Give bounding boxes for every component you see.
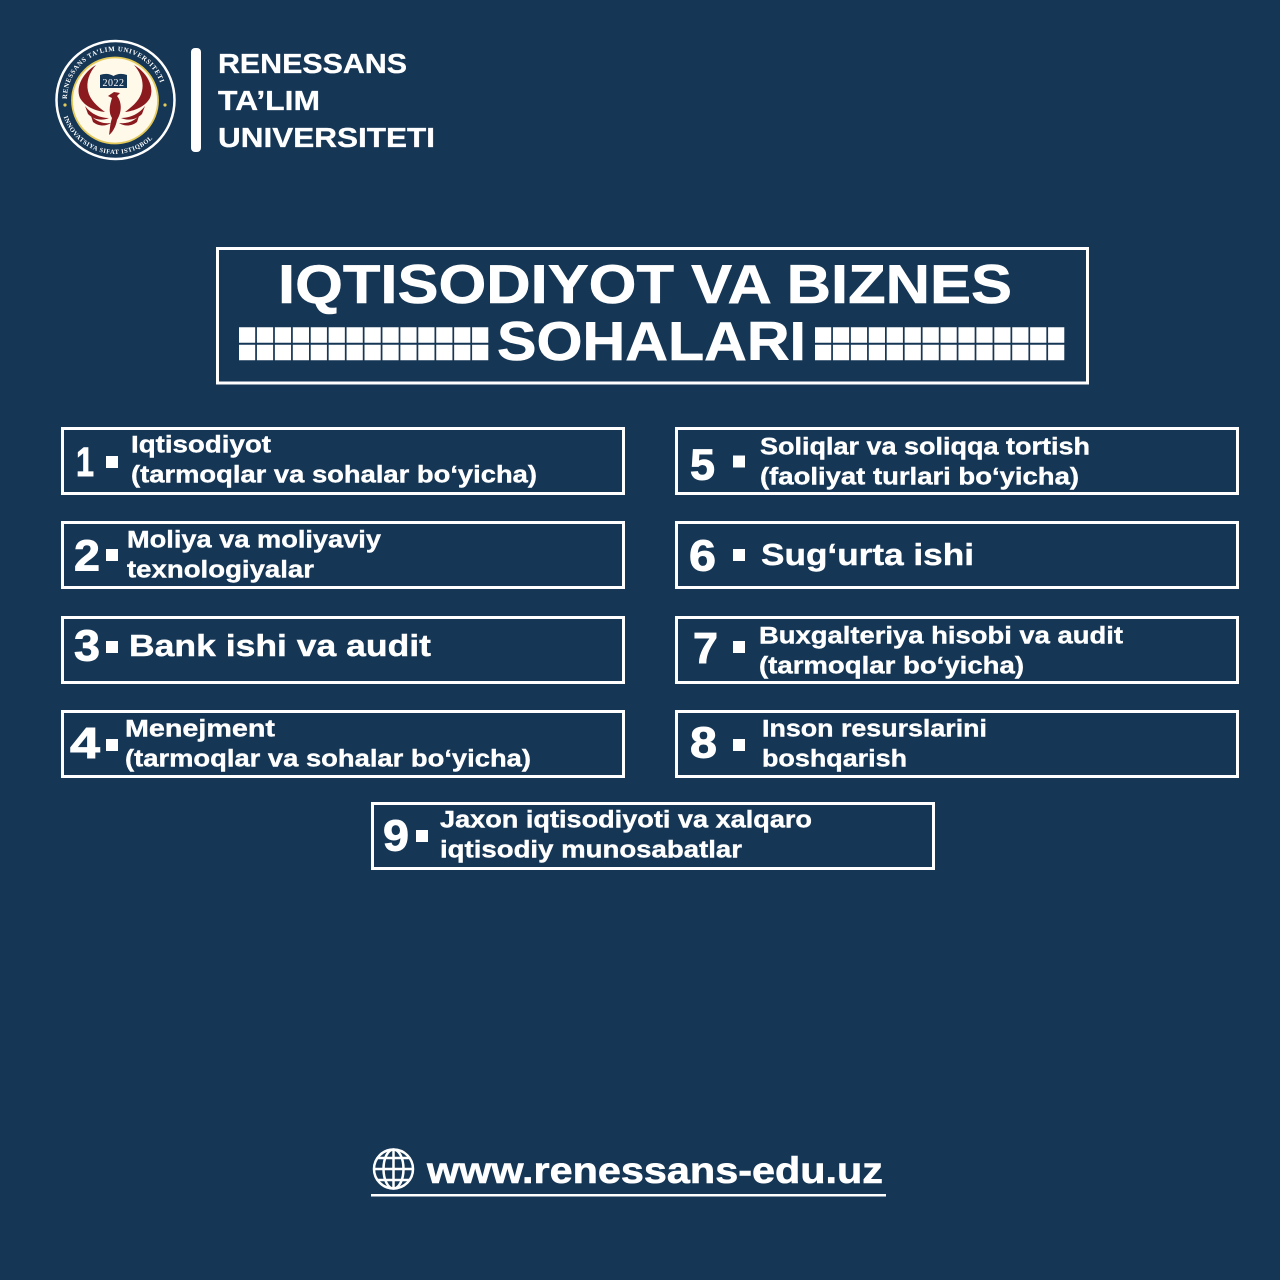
item 6: Sug‘urta ishi: [761, 537, 974, 572]
title panel: SOHALARI: [497, 310, 806, 372]
logo: university seal: RENESSANS TA’LIM UNIVERSITETI: [62, 46, 164, 99]
item 4: 4: [70, 719, 101, 768]
website underline: [371, 1194, 886, 1196]
title panel: IQTISODIYOT VA BIZNES: [278, 253, 1012, 315]
item 7: [676, 618, 1238, 682]
item 8: Inson resurslarini: [762, 716, 987, 742]
item 1: Iqtisodiyot: [131, 432, 271, 458]
icon: globe: [374, 1150, 413, 1188]
item 8: 8: [690, 718, 717, 768]
item 2: [62, 522, 624, 588]
header: university name: TA’LIM: [218, 85, 320, 116]
item 8: [676, 712, 1238, 776]
item 3: [62, 618, 624, 682]
item 9: 9: [383, 812, 409, 860]
item 9: [372, 804, 934, 868]
header: university name: [218, 48, 435, 153]
title panel: [218, 248, 1088, 383]
logo: university seal: [55, 40, 176, 160]
item 3: Bank ishi va audit: [129, 628, 431, 663]
item 9: iqtisodiy munosabatlar: [440, 836, 743, 864]
logo: university seal: 2022: [102, 78, 124, 89]
item 8: boshqarish: [762, 746, 907, 772]
item 7: Buxgalteriya hisobi va audit: [759, 622, 1123, 650]
item 5: Soliqlar va soliqqa tortish: [760, 434, 1090, 460]
item 5: 5: [690, 440, 715, 490]
item 2: Moliya va moliyaviy: [127, 526, 381, 554]
item 1: (tarmoqlar va sohalar bo‘yicha): [131, 462, 537, 488]
item 2: texnologiyalar: [127, 556, 315, 584]
header divider bar: [191, 48, 201, 152]
item 6: [676, 522, 1238, 588]
item 9: Jaxon iqtisodiyoti va xalqaro: [440, 806, 812, 834]
item 1: 1: [76, 439, 94, 485]
item 1: [62, 428, 624, 494]
item 2: 2: [74, 532, 100, 580]
item 5: [676, 428, 1238, 494]
website address: www.renessans-edu.uz: [426, 1150, 883, 1191]
item 5: (faoliyat turlari bo‘yicha): [760, 464, 1079, 490]
item 3: 3: [74, 622, 100, 670]
item 4: Menejment: [125, 716, 275, 742]
item 7: (tarmoqlar bo‘yicha): [759, 652, 1024, 680]
item 4: (tarmoqlar va sohalar bo‘yicha): [125, 746, 531, 772]
item 7: 7: [693, 624, 718, 673]
item 6: 6: [689, 532, 716, 580]
logo: university seal: INNOVATSIYA SIFAT ISTIQBOL: [64, 116, 152, 154]
header: university name: RENESSANS: [218, 48, 407, 79]
item 4: [62, 712, 624, 776]
header: university name: UNIVERSITETI: [218, 122, 435, 153]
